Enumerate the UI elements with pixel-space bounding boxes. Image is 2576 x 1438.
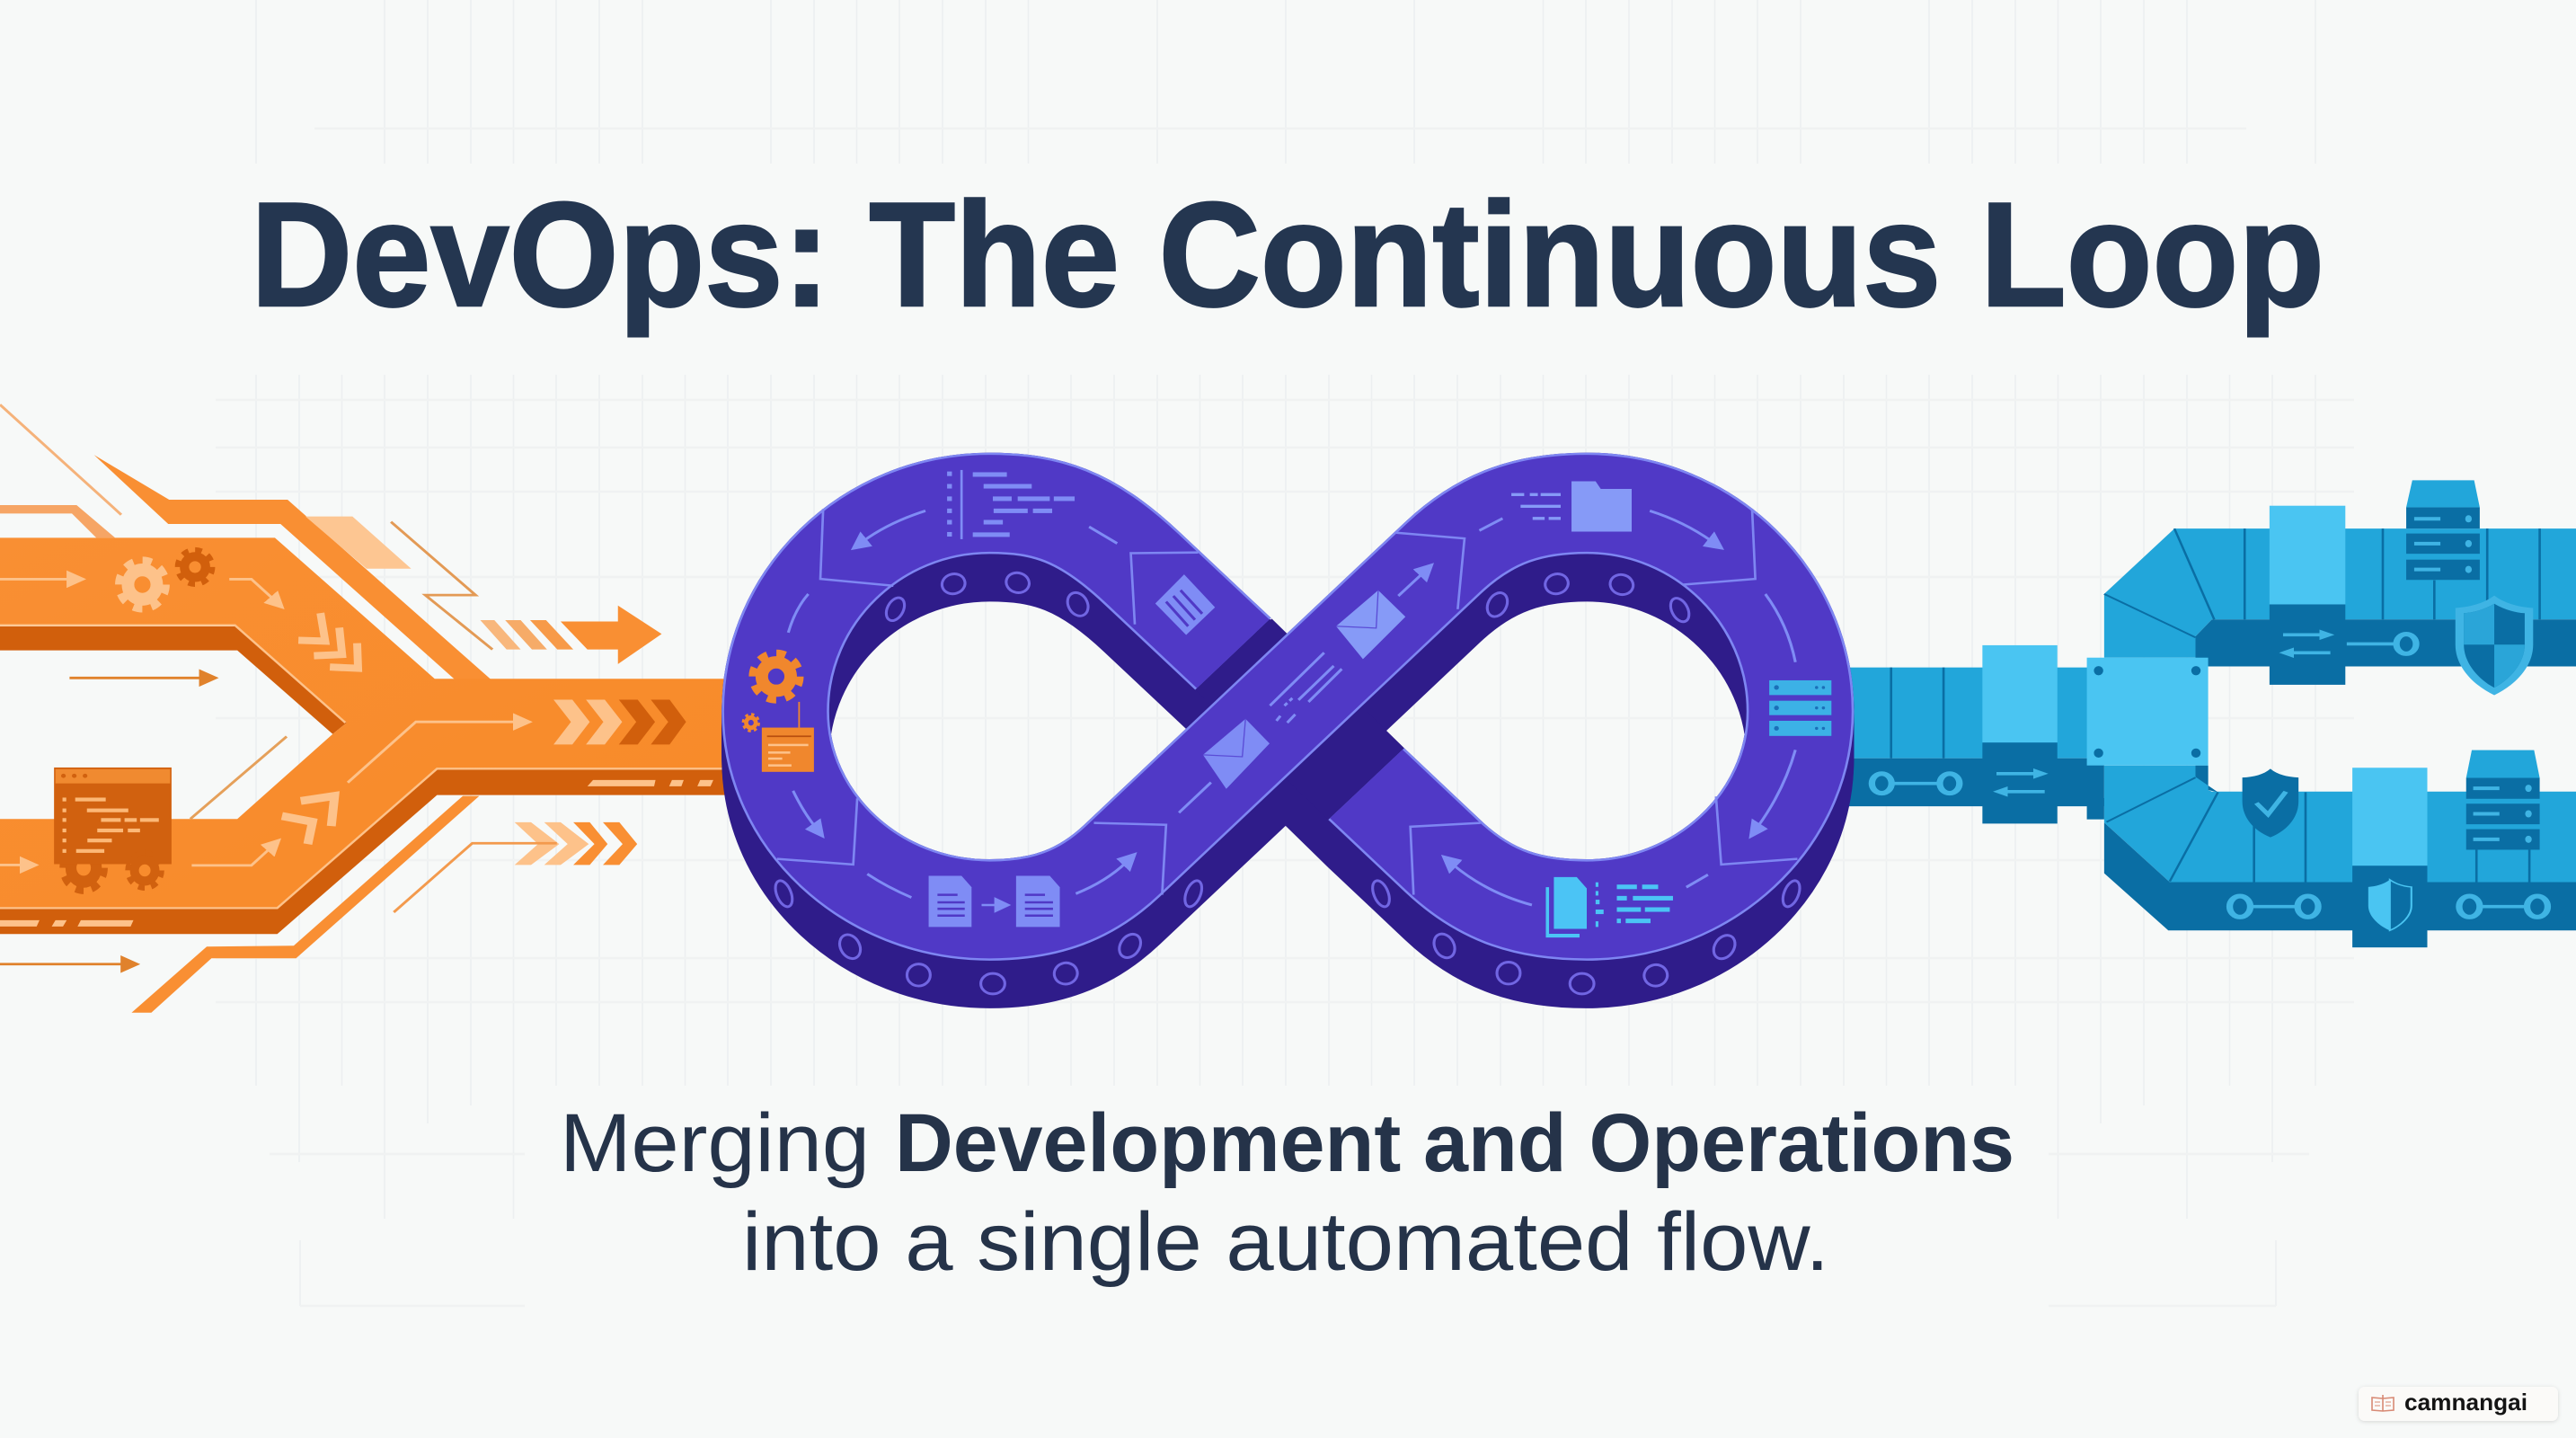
- chevrons lower right: [515, 822, 637, 865]
- icon: code listing: [947, 470, 1075, 539]
- left connector block: [1982, 645, 2058, 823]
- icon: center envelope with code lines: [1203, 652, 1341, 789]
- icon: check shield: [2243, 768, 2298, 838]
- gear light: [119, 561, 166, 608]
- icon: document pair with arrow: [929, 876, 1060, 927]
- big chevrons on stem: [553, 700, 686, 744]
- light parallelogram: [305, 517, 412, 569]
- arrow: outside bottom: [0, 962, 125, 967]
- orange merging arrows: development input: [0, 404, 733, 1013]
- subtitle line 1 bold: Development and Operations: [895, 1097, 2014, 1189]
- loop side wall: [775, 503, 1801, 957]
- arrow: upper track: [0, 576, 70, 581]
- icon: tilted document: [1155, 574, 1215, 635]
- subtitle: [560, 1097, 2014, 1288]
- title: DevOps: The Continuous Loop: [251, 172, 2324, 337]
- loop arrows and dashes: [788, 510, 1795, 905]
- arrow line lower right: [394, 843, 557, 912]
- lower rail: [131, 796, 479, 1013]
- icon: links lower: [2230, 896, 2547, 917]
- arrow: lower track: [0, 862, 23, 867]
- left pipe segment: [1842, 668, 2104, 806]
- arrow: curved lower: [191, 848, 270, 865]
- icon: server lower: [2466, 750, 2540, 849]
- half gear under window: [63, 846, 104, 891]
- icon: link left: [1872, 774, 1960, 794]
- upper pipe: [2104, 506, 2576, 685]
- main merged arrow body: [0, 537, 733, 908]
- thin diagonal accent: [0, 404, 121, 515]
- wall rivets right: [1369, 571, 1803, 994]
- icon: bright document stack: [1545, 877, 1673, 937]
- gear dark: [178, 550, 212, 584]
- blue pipeline: operations output: [1842, 480, 2576, 947]
- loop top surface: [775, 503, 1801, 910]
- purple infinity loop: [743, 470, 1831, 994]
- icon: server upper: [2406, 480, 2480, 580]
- icon: upper envelope: [1336, 590, 1405, 659]
- icon: key link upper: [2347, 635, 2416, 653]
- icon: orange gear small: [743, 715, 759, 731]
- band section dividers: [777, 509, 1797, 895]
- upper rail: [94, 455, 491, 679]
- icon: folder with lines: [1511, 482, 1632, 532]
- icon: swap arrows upper: [2283, 635, 2331, 652]
- arrow: outside middle: [69, 675, 203, 680]
- chevrons lower arm: [282, 796, 334, 844]
- gear under window: [128, 853, 162, 888]
- inner merge arrow: [348, 722, 517, 783]
- icon: swap arrows left: [1996, 774, 2045, 792]
- icon: server stack on loop: [1769, 680, 1831, 736]
- zigzag line: [391, 522, 492, 650]
- watermark badge: [2359, 1387, 2558, 1421]
- icon: book: [2372, 1395, 2394, 1411]
- lower pipe: [2087, 766, 2576, 947]
- icon: half shield: [2368, 880, 2412, 930]
- wall rivets left: [772, 570, 1205, 994]
- hash arrow upper right: [481, 606, 661, 664]
- arrow: curved upper: [229, 579, 273, 599]
- chevrons upper arm: [298, 613, 359, 669]
- icon: orange document: [762, 702, 814, 772]
- thin upper rail: [0, 505, 115, 537]
- icon: code window: [54, 768, 172, 864]
- dashes on dark edge: [0, 780, 713, 927]
- icon: quartered shield: [2456, 596, 2533, 696]
- dark side shading: [0, 626, 733, 934]
- icon: orange gear large: [753, 653, 800, 700]
- subtitle line 2: into a single automated flow.: [742, 1196, 1829, 1288]
- diagonal line: [190, 736, 287, 819]
- watermark text: camnangai: [2404, 1389, 2527, 1416]
- central junction with rivets: [2087, 658, 2209, 766]
- subtitle line 1 regular: Merging: [560, 1097, 870, 1189]
